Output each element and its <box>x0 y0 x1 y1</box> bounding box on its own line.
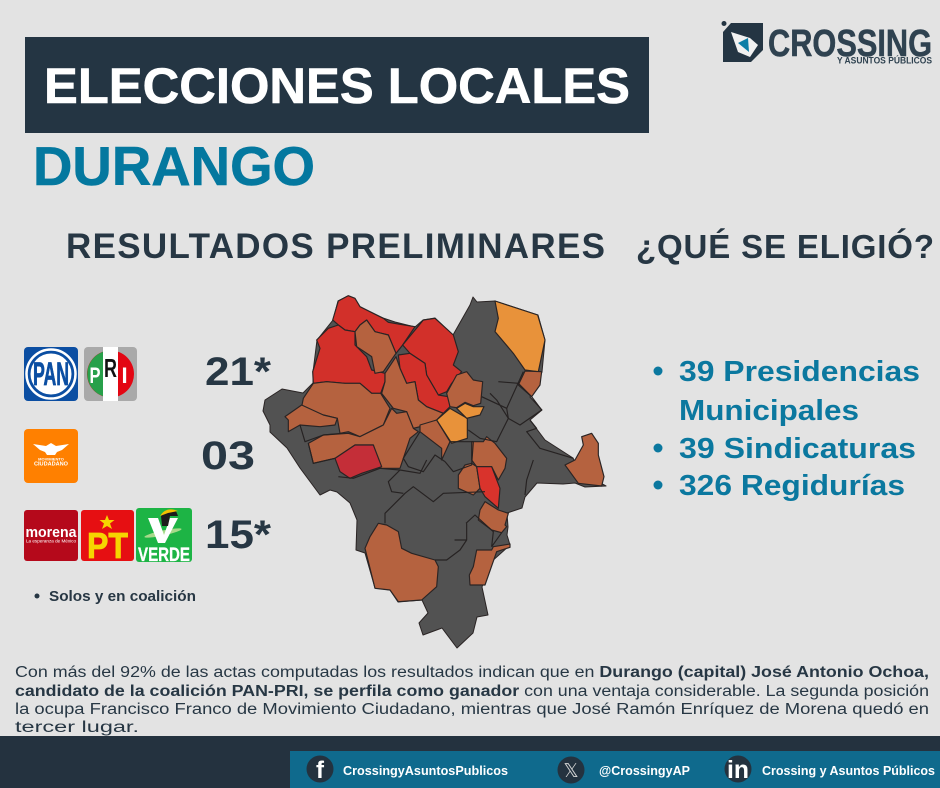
social: X: @CrossingyAP <box>599 764 690 778</box>
logo: PT: PT <box>87 525 128 566</box>
text block: summary paragraph <box>15 664 929 736</box>
logo: Morena <box>24 510 78 561</box>
red municipality strip <box>477 467 500 508</box>
brown municipality centre S <box>472 437 507 480</box>
count: Movimiento Ciudadano: 03 <box>201 434 255 478</box>
brown municipality W small <box>285 405 337 432</box>
text block: summary paragraph: Con más del 92% de las actas computadas los resultados indican que en Durango (capital) José Antonio Ochoa, <box>15 664 929 681</box>
brown municipality N <box>355 320 396 373</box>
title banner: ELECCIONES LOCALES <box>44 58 630 114</box>
item: presidencias municipales <box>654 356 920 427</box>
brown municipality SE <box>469 544 510 585</box>
logo: Morena: morena <box>26 524 77 541</box>
logo: Verde: VERDE <box>138 545 190 566</box>
brown municipality centre S left <box>458 463 480 495</box>
logo: PRI: I <box>121 363 128 388</box>
text block: summary paragraph: candidato de la coalición PAN-PRI, se perfila como ganador con una ventaja considerable. La segunda posición <box>15 683 929 700</box>
social: LinkedIn <box>724 756 935 784</box>
map: municipalities of Durango <box>263 296 606 648</box>
logo: Movimiento Ciudadano <box>24 429 78 483</box>
logo: PRI: P <box>90 363 100 388</box>
footer bar <box>0 736 940 788</box>
social: X <box>558 756 690 784</box>
heading: Durango: DURANGO <box>33 135 315 197</box>
orange municipality small <box>457 403 484 418</box>
brown municipality NE small <box>518 371 542 397</box>
count: PAN-PRI: 21* <box>205 350 271 394</box>
heading: Qué se eligió: ¿QUÉ SE ELIGIÓ? <box>636 228 934 265</box>
logo: PT <box>81 510 134 566</box>
count: Morena-PT-Verde: 15* <box>205 513 271 557</box>
brown municipality W large <box>302 382 390 437</box>
logo: Morena: La esperanza de México <box>26 538 77 544</box>
heading: Resultados preliminares: RESULTADOS PRELIMINARES <box>66 227 605 266</box>
orange municipality NE <box>495 301 545 372</box>
item: presidencias municipales: 39 Presidencias <box>679 356 920 388</box>
social: Facebook: CrossingyAsuntosPublicos <box>343 764 508 778</box>
item: regidurías: 326 Regidurías <box>679 470 905 502</box>
social: Facebook <box>306 756 508 784</box>
crimson municipality <box>335 445 382 478</box>
note: solos y en coalición: Solos y en coalición <box>49 588 196 605</box>
brown municipality centre <box>382 357 443 428</box>
social: Facebook: f <box>316 757 325 784</box>
logo: Crossing y Asuntos Públicos: Y ASUNTOS PÚBLICOS <box>837 54 932 66</box>
logo: Verde <box>136 508 192 566</box>
logo: PRI: R <box>104 353 117 383</box>
municipal boundary lines <box>300 372 573 560</box>
red municipality NW <box>333 296 415 353</box>
brown municipality below strip <box>478 502 508 533</box>
list: what was elected <box>654 356 920 502</box>
red municipality N centre <box>403 318 462 395</box>
item: presidencias municipales: Municipales <box>679 395 859 427</box>
logo: PAN: PAN <box>33 356 69 392</box>
text block: summary paragraph: la ocupa Francisco Franco de Movimiento Ciudadano, mientras que José Ramón Enríquez de Morena quedó en <box>15 701 929 718</box>
brown municipality S large <box>365 523 438 602</box>
social: LinkedIn: Crossing y Asuntos Públicos <box>762 764 935 778</box>
social: LinkedIn: in <box>727 756 749 784</box>
brown municipality NE centre <box>447 372 483 408</box>
state base in dark grey <box>263 296 606 648</box>
red municipality centre <box>398 353 450 413</box>
brown municipality <box>420 420 450 460</box>
logo: Movimiento Ciudadano: MOVIMIENTO <box>38 456 64 462</box>
orange municipality centre <box>437 408 467 443</box>
red municipality W <box>313 325 385 393</box>
logo: PRI <box>84 347 137 401</box>
title banner <box>25 37 649 133</box>
brown municipality E <box>565 433 604 486</box>
logo: Movimiento Ciudadano: CIUDADANO <box>34 462 68 468</box>
logo: PAN <box>24 347 78 401</box>
text block: summary paragraph: tercer lugar. <box>15 719 139 736</box>
brown municipality SW centre <box>308 408 418 468</box>
social: X: 𝕏 <box>563 761 579 782</box>
item: sindicaturas: 39 Sindicaturas <box>679 433 916 465</box>
